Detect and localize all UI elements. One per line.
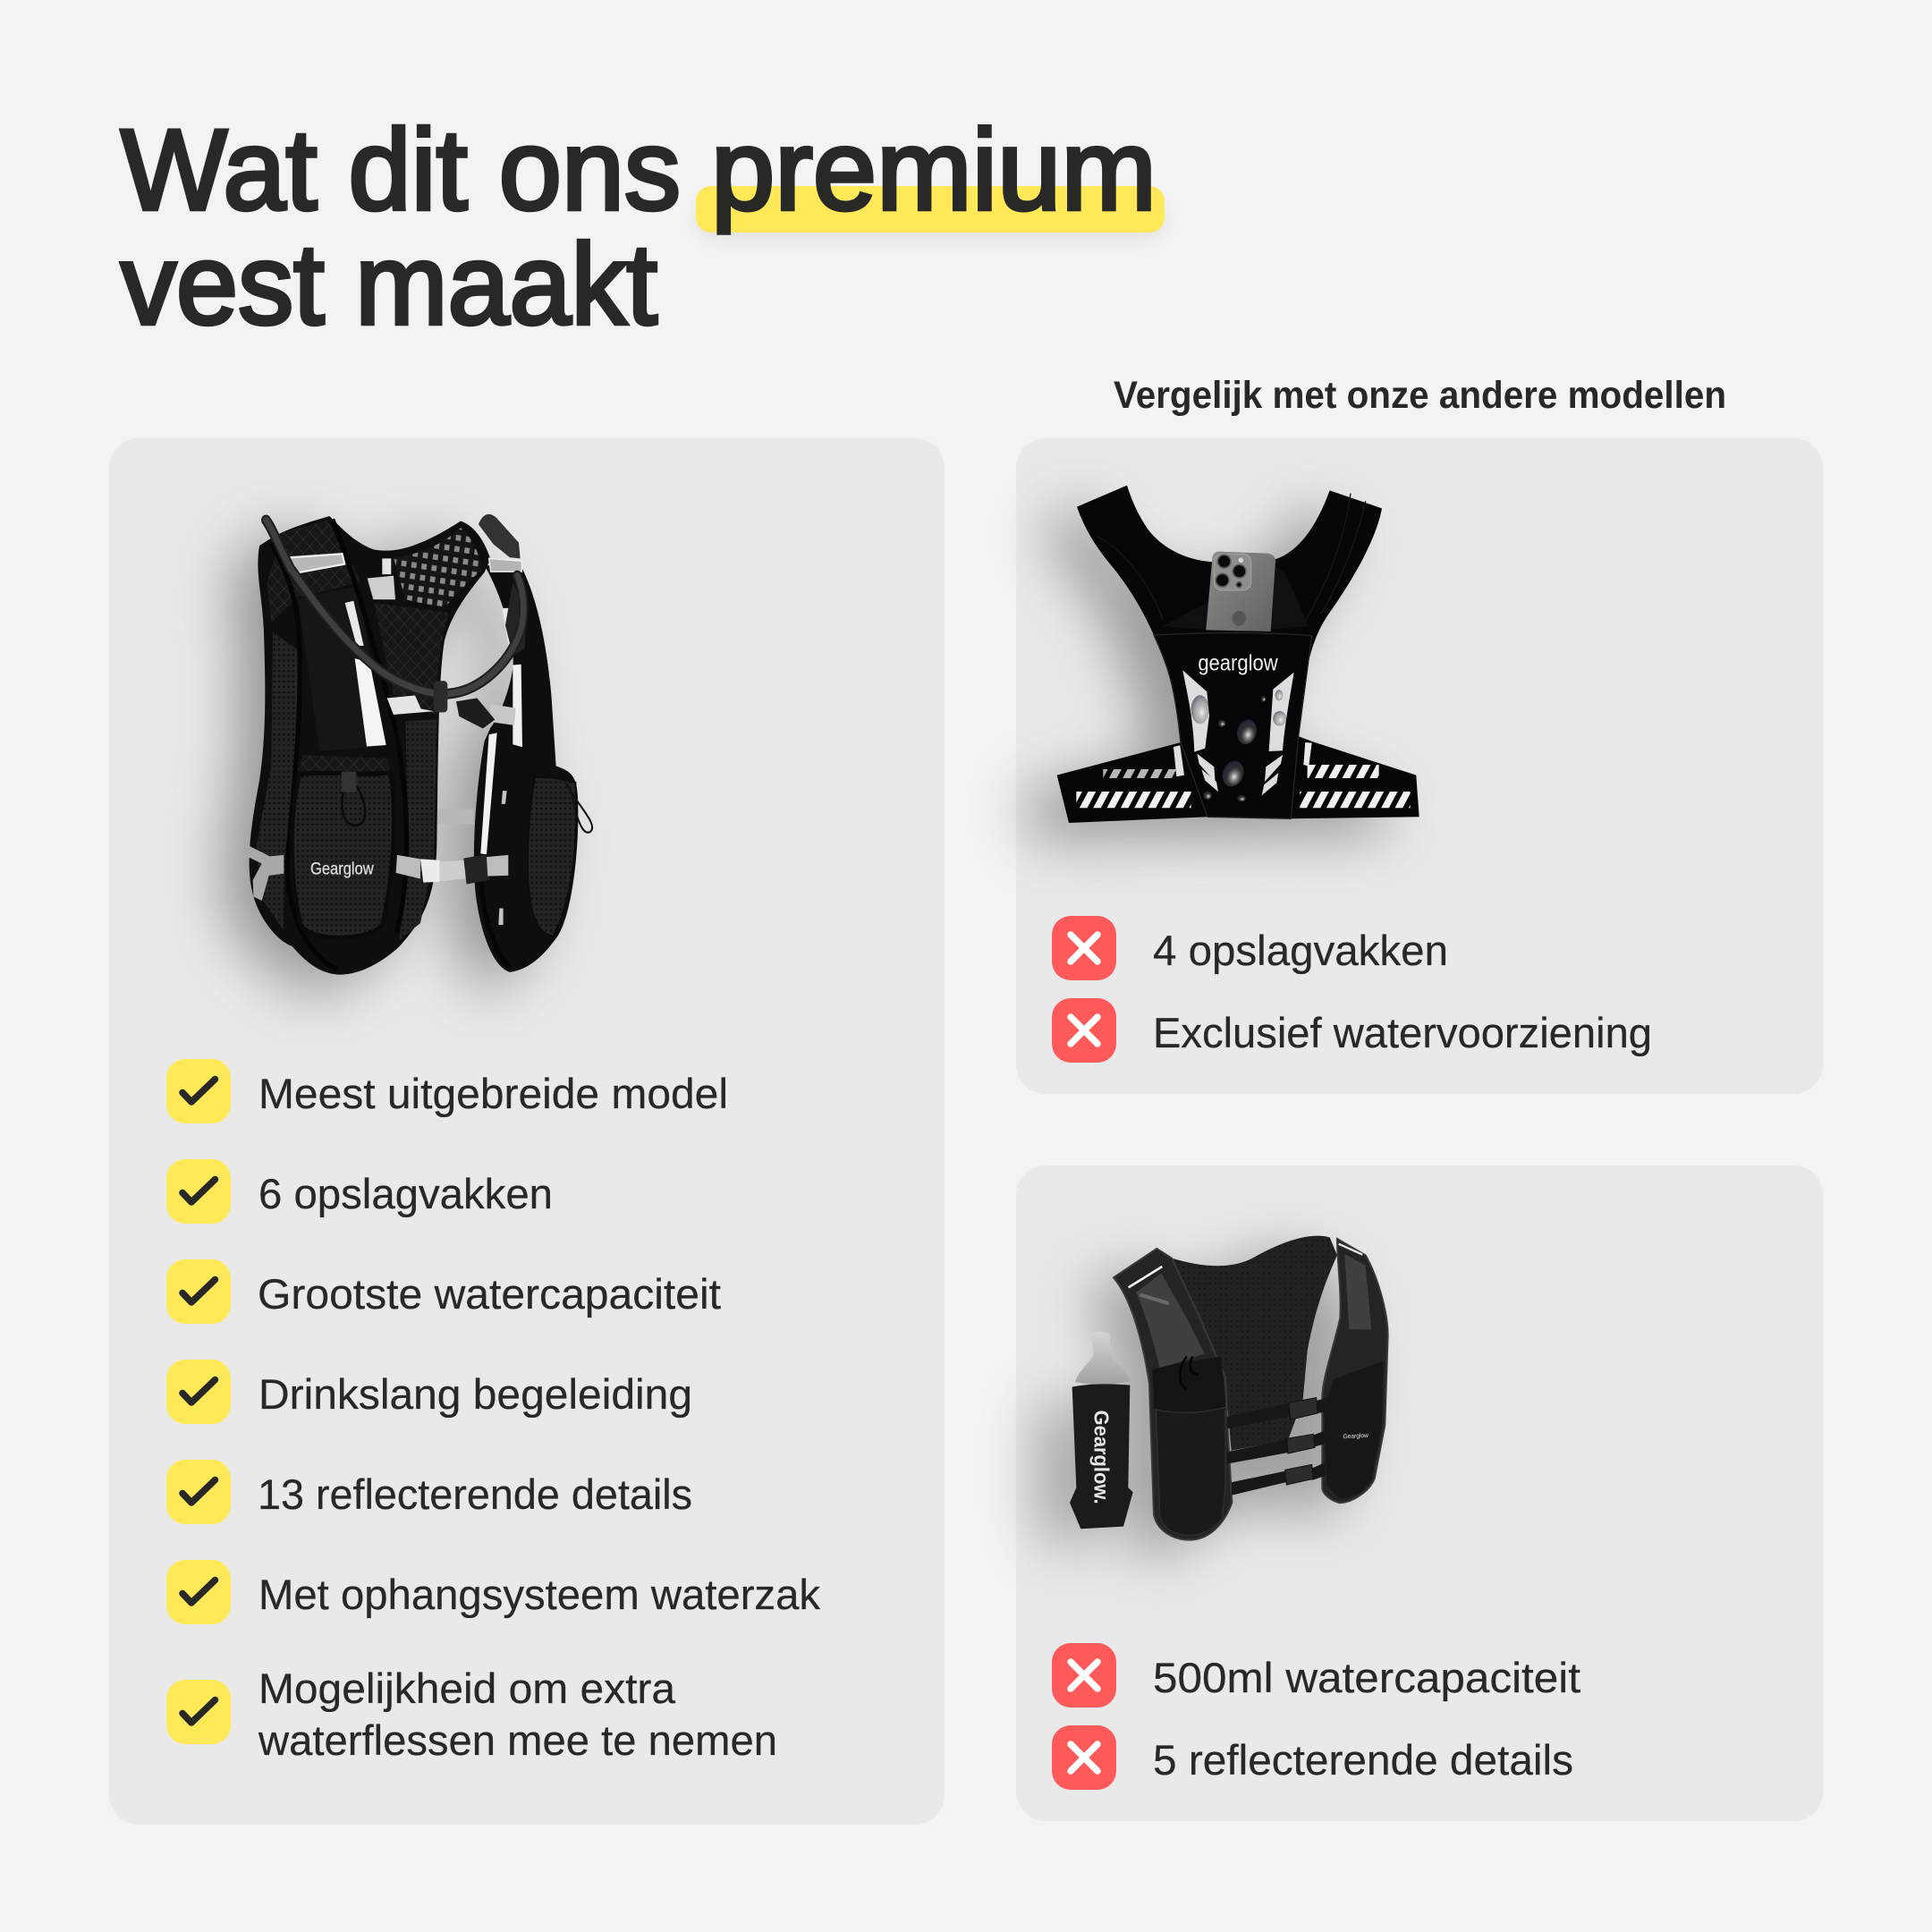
vest shadow [1024,504,1386,841]
product image: vest with soft bottle [1040,1236,1388,1556]
feature text: Exclusief watervoorziening [1153,1009,1652,1056]
feature text: Mogelijkheid om extra [258,1665,676,1712]
feature text: Drinkslang begeleiding [258,1370,692,1418]
chest strap upper [387,696,516,729]
front panel [298,586,386,751]
feature text: 4 opslagvakken [1153,927,1448,974]
top reflective strap right [489,558,521,572]
right front panel [1322,1239,1388,1503]
feature text: 6 opslagvakken [258,1170,553,1217]
chest straps [1227,1395,1335,1496]
right inner panel [1344,1254,1371,1330]
camera module [1214,554,1251,590]
right body [474,563,578,972]
right reflective stripe [1339,1244,1362,1255]
hanging loop [382,558,391,574]
drawcord [342,781,365,826]
product image: phone running vest [1024,486,1419,841]
brand name: gearglow [1198,650,1278,675]
mesh pocket [1163,566,1309,632]
drink valve [479,514,521,558]
panel background [109,438,945,1825]
feature: exclusief watervoorziening [1052,998,1652,1063]
title line 1 start: Wat dit ons [121,106,681,234]
bottle brand name: Gearglow. [1089,1411,1113,1504]
lower center mesh [400,720,436,940]
flash [1239,558,1243,563]
left pocket cover [300,755,391,775]
bottle neck [1075,1332,1131,1386]
black piping [271,520,510,970]
feature text: 13 reflecterende details [258,1470,692,1518]
feature text: Grootste watercapaciteit [258,1270,721,1318]
feature: 5 reflecterende details [1052,1725,1573,1790]
icon: cross [1052,1725,1116,1790]
reflective stripes [1076,742,1411,808]
shoulder mesh [267,520,360,622]
right pocket loop [566,784,592,833]
left reflective stripe [1129,1267,1162,1287]
feature text: Met ophangsysteem waterzak [258,1571,821,1618]
right zipper and strips [480,582,526,925]
icon: cross [1052,916,1116,980]
icon: check [166,1159,231,1224]
left and back body [250,516,490,975]
right brand name: Gearglow [1343,1433,1369,1440]
vest shadow [221,531,550,989]
zipper [345,601,364,646]
title highlight [696,186,1165,238]
feature text: 5 reflecterende details [1153,1736,1573,1784]
icon: check [166,1560,231,1624]
icon: cross [1052,998,1116,1063]
drink tube [266,520,523,694]
feature: 6 opslagvakken [166,1159,553,1224]
feature text: 500ml watercapaciteit [1153,1654,1580,1701]
middle elastic [437,809,473,824]
logo [1233,611,1246,626]
product shadow [1040,1250,1358,1556]
bottle body [1070,1384,1133,1529]
panel background [1016,1165,1823,1821]
mesh pocket [1156,1407,1225,1536]
panel: premium vest [109,438,945,1825]
collar opening [368,576,395,599]
shoulder folds [1097,494,1366,620]
right pocket [528,777,576,936]
product image: premium hydration vest [221,514,592,989]
reflective panels [1182,670,1294,795]
panel: phone vest model [1016,438,1823,1094]
pocket opening [1152,1357,1225,1412]
pocket zip [1154,633,1312,818]
feature text: waterflessen mee te nemen [258,1716,777,1764]
left inner panel [1136,1273,1205,1368]
icon: check [166,1460,231,1524]
drawcord [1180,1357,1199,1389]
buckles [1285,1398,1318,1485]
icon: check [166,1059,231,1123]
feature: drinkslang begeleiding [166,1360,692,1424]
icon: check [166,1259,231,1324]
reflective strip [355,658,386,747]
comparison heading: Vergelijk met onze andere modellen [1114,374,1726,417]
brand name: Gearglow [310,859,374,878]
panel: bottle vest model [1016,1165,1823,1821]
top reflective strap left [285,554,344,574]
center back mesh [374,603,449,715]
left side mesh [257,631,299,930]
left pocket [292,773,394,938]
harness [1057,486,1419,823]
side strap [248,845,284,901]
back mesh [1172,1236,1337,1451]
left shoulder and pocket [1114,1249,1232,1540]
lenses [1216,555,1246,588]
title line 2: vest maakt [121,221,657,349]
feature list [166,1059,821,1764]
feature: 13 reflecterende details [166,1460,692,1524]
chest strap lower [396,854,508,884]
zip puller [1141,1295,1167,1303]
right lower pocket [1324,1361,1384,1498]
icon: cross [1052,1643,1116,1707]
feature: 4 opslagvakken [1052,916,1448,980]
feature: grootste watercapaciteit [166,1259,721,1324]
feature: meest uitgebreide model [166,1059,728,1123]
title [121,106,1165,349]
feature: 500ml watercapaciteit [1052,1643,1580,1707]
upper back grid mesh [394,528,481,608]
cord lock [342,772,356,792]
icon: check [166,1680,231,1744]
feature: met ophangsysteem waterzak [166,1560,821,1624]
feature text: Meest uitgebreide model [258,1070,728,1117]
icon: check [166,1360,231,1424]
tube clip [434,681,447,712]
phone [1206,552,1275,631]
feature: extra waterflessen [166,1665,777,1764]
title line 1 highlighted word: premium [711,106,1157,234]
panel background [1016,438,1823,1094]
water drops [1191,690,1286,801]
feature text [258,1665,777,1764]
